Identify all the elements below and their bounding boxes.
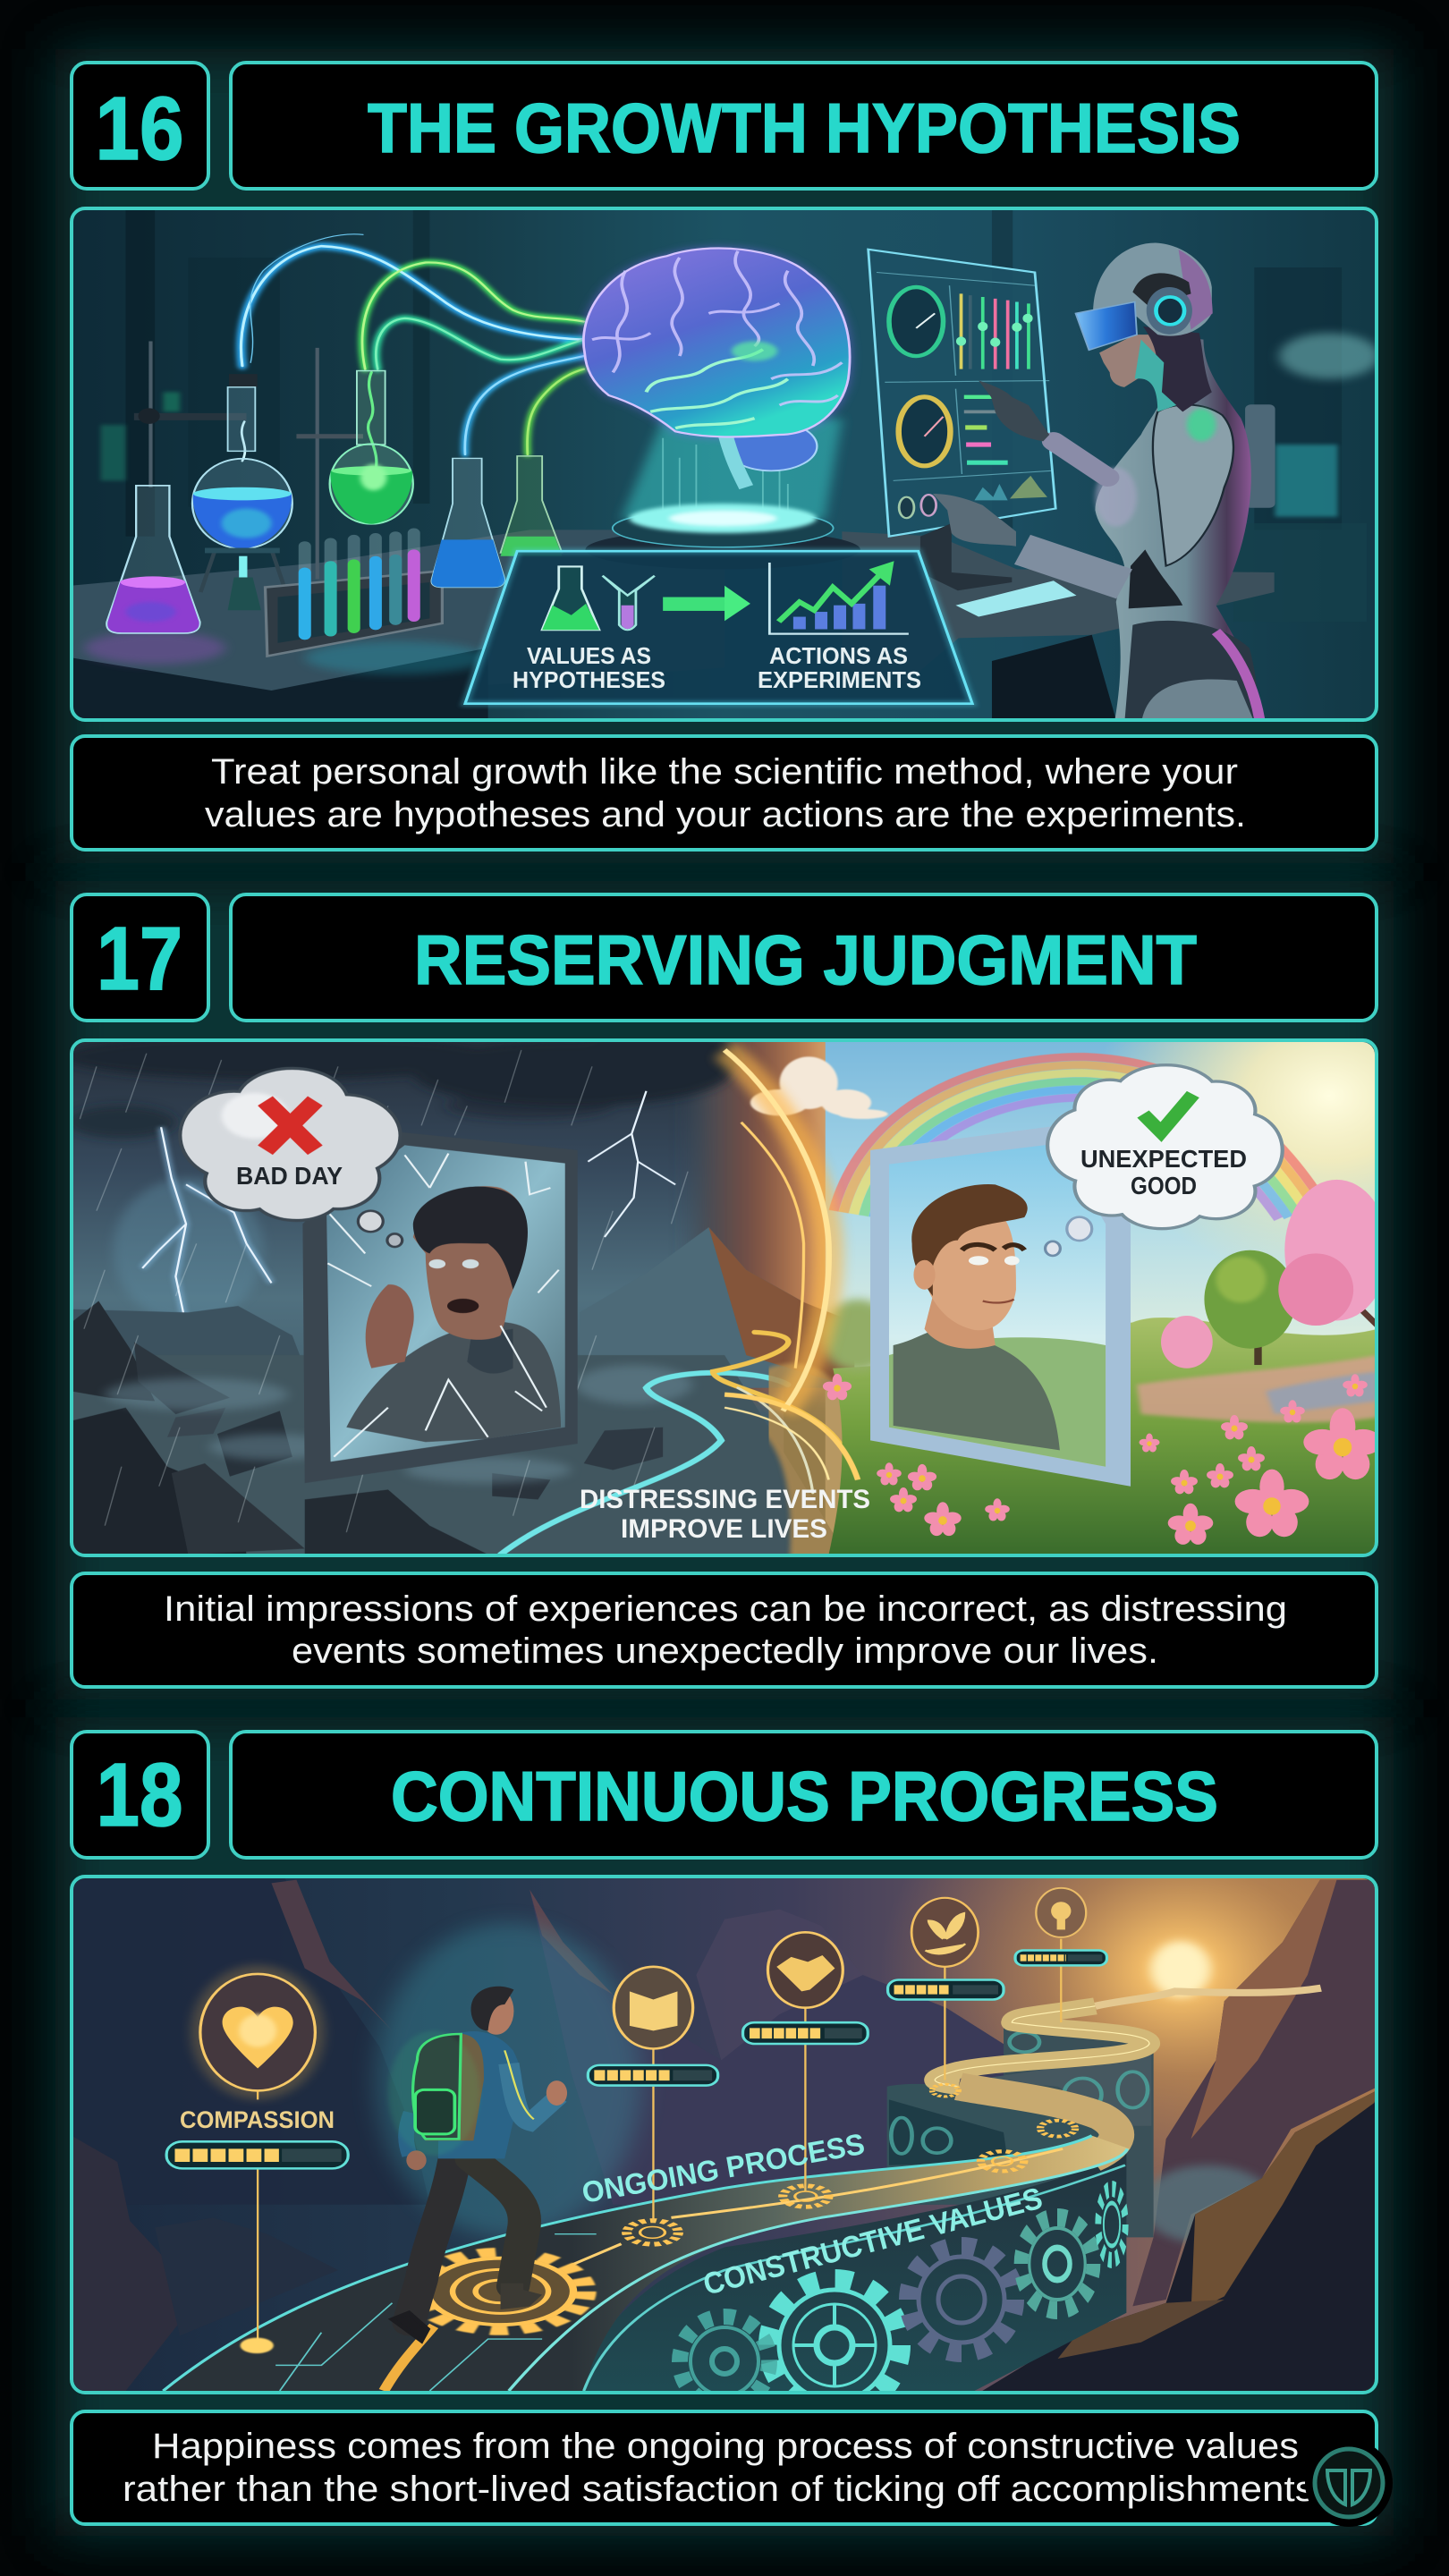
panel: storm and meadow illustration (64, 1021, 1389, 1558)
upper arm and hand (1054, 441, 1107, 478)
illustration labels: values and actions: VALUES AS (527, 642, 651, 669)
icon: book (614, 1967, 693, 2049)
ongoing process label: ONGOING PROCESS (580, 2127, 867, 2209)
number badge 17 (72, 894, 208, 1021)
icon: handshake (767, 1932, 843, 2008)
heading: reserving judgment (231, 894, 1377, 1021)
storm clouds (64, 1024, 738, 1139)
dim lab background (101, 208, 1379, 622)
green tree (1254, 1329, 1262, 1365)
left broken mirror (302, 1132, 578, 1483)
worried man (346, 1322, 561, 1442)
icon: growth chart (769, 563, 909, 634)
illustration labels: values and actions: ACTIONS AS (769, 642, 908, 669)
panel: path illustration (67, 1873, 1384, 2411)
brain hologram (583, 249, 850, 487)
thought labels and road label: GOOD (1131, 1172, 1197, 1199)
distant ridge (72, 1306, 305, 1368)
meadow (820, 1180, 1389, 1555)
heading: reserving judgment: RESERVING JUDGMENT (414, 920, 1197, 999)
icon: heart (191, 1965, 325, 2099)
test tube rack (266, 571, 442, 657)
round green flask (357, 371, 386, 445)
small pink tree (1161, 1316, 1213, 1368)
icon: flask (542, 566, 599, 630)
icon: light bulb (1036, 1888, 1086, 1937)
caption 17 (72, 1573, 1377, 1687)
teal glow behind traveller (376, 1922, 642, 2237)
energy streams (241, 234, 584, 478)
thought bubble: bad day (182, 1070, 402, 1247)
image frame 17 (72, 1040, 1377, 1555)
left desk (73, 530, 621, 691)
lab glassware (106, 342, 562, 657)
icon: test tube (603, 576, 655, 630)
caption 18: Happiness comes from the ongoing process of constructive values (152, 2427, 1299, 2466)
lower arm and hand (1022, 549, 1124, 584)
logo badge (1305, 2439, 1393, 2527)
conical flasks (501, 456, 562, 553)
number badge 18 (72, 1732, 208, 1858)
lightning bolts (142, 1091, 675, 1316)
hologram pedestal (585, 537, 860, 550)
walkway road (935, 1988, 1321, 2158)
purple flask (106, 486, 199, 633)
traveller with backpack (388, 1987, 567, 2341)
caption 16: values are hypotheses and your actions are the experiments. (205, 795, 1246, 835)
progress bars (166, 1951, 1106, 2168)
golden transition swoosh (724, 1050, 858, 1479)
thought labels and road label (236, 1145, 1247, 1544)
day cloud (750, 1056, 888, 1119)
machine walls (566, 2024, 1154, 2391)
caption 18 (72, 2411, 1377, 2524)
thought labels and road label: UNEXPECTED (1080, 1145, 1247, 1173)
glowing waypoint gears (415, 2084, 1075, 2330)
number badge 17: 17 (97, 909, 182, 1009)
image frame 16 (72, 208, 1377, 720)
number badge 18: 18 (97, 1745, 182, 1845)
central road (501, 1332, 842, 1555)
value markers (166, 1888, 1106, 2353)
machine gears (680, 2189, 1125, 2411)
rocky ground (72, 1355, 846, 1555)
illustration labels: values and actions: EXPERIMENTS (758, 666, 921, 693)
compassion label: COMPASSION (180, 2106, 335, 2133)
thought labels and road label: BAD DAY (236, 1162, 343, 1190)
keyboard (955, 580, 1076, 617)
constructive values label: CONSTRUCTIVE VALUES (699, 2182, 1046, 2302)
heading: the growth hypothesis (231, 63, 1377, 189)
rainbow (834, 1056, 1328, 1219)
flowers (823, 1374, 1382, 1545)
number badge 16: 16 (95, 79, 184, 179)
panel: laboratory illustration (67, 205, 1384, 726)
heading: continuous progress (231, 1732, 1377, 1858)
caption 17: events sometimes unexpectedly improve our lives. (292, 1631, 1158, 1671)
hologram beam (622, 419, 842, 520)
sun glow (1151, 1941, 1209, 1997)
right clear mirror (870, 1126, 1131, 1487)
thought bubble: unexpected good (1046, 1066, 1281, 1256)
right cliffs (979, 1880, 1378, 2394)
caption 16 (72, 736, 1377, 850)
monitor stand (920, 523, 1012, 590)
caption 17: Initial impressions of experiences can be incorrect, as distressing (164, 1589, 1287, 1629)
illustration labels: values and actions: HYPOTHESES (513, 666, 665, 693)
caption 16: Treat personal growth like the scientific method, where your (211, 752, 1238, 792)
right desk (842, 531, 1275, 643)
heading: continuous progress: CONTINUOUS PROGRESS (391, 1757, 1218, 1835)
blossom tree (1341, 1290, 1377, 1326)
section 17 (64, 894, 1389, 1687)
thought labels and road label: IMPROVE LIVES (621, 1514, 827, 1544)
icon: arrow (663, 597, 725, 611)
round blue flask (229, 374, 258, 387)
number badge 16 (72, 63, 208, 189)
section 18 (67, 1732, 1393, 2527)
hologram comparison card (465, 551, 972, 704)
robot scientist (933, 243, 1275, 725)
left foreground hills (72, 2136, 192, 2391)
ground mist (105, 1365, 692, 1483)
background mountains (72, 1877, 429, 2205)
illustration labels: values and actions (513, 642, 921, 693)
image frame 18 (72, 1877, 1377, 2393)
caption 18: rather than the short-lived satisfaction of ticking off accomplishments. (123, 2470, 1326, 2509)
section 16 (67, 63, 1384, 850)
head (1099, 335, 1164, 387)
rain (80, 1050, 688, 1532)
thought labels and road label: DISTRESSING EVENTS (580, 1485, 870, 1514)
heading: the growth hypothesis: THE GROWTH HYPOTHESIS (368, 89, 1241, 167)
holographic dashboard (869, 250, 1055, 537)
icon: plant in hand (911, 1898, 979, 1967)
